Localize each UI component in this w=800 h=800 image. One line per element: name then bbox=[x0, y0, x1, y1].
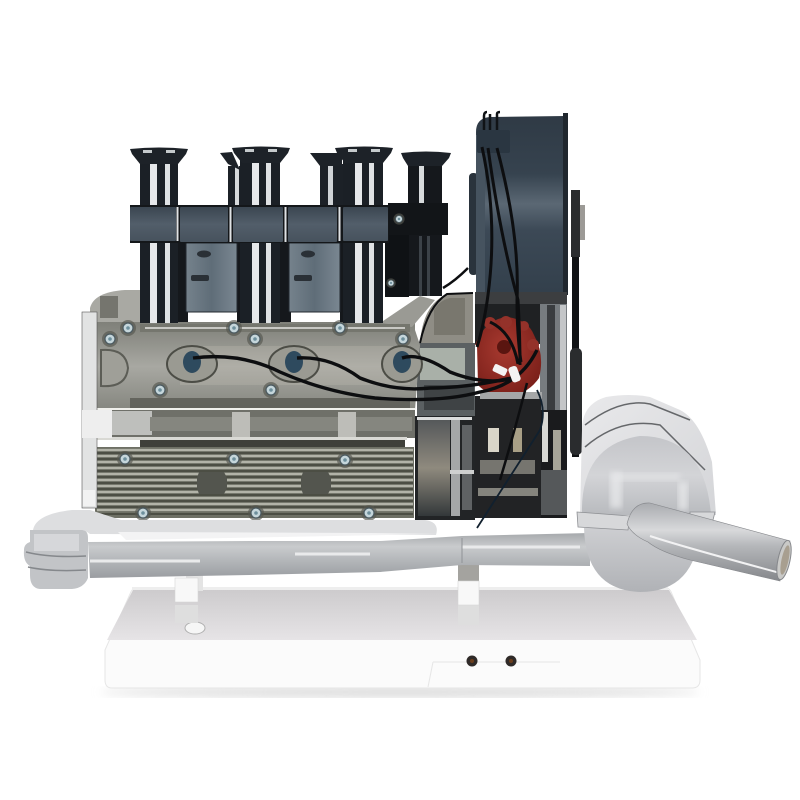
tailpipe bbox=[627, 503, 794, 581]
base plinth bbox=[100, 587, 700, 697]
left clear plate bbox=[82, 312, 97, 508]
distributor cap bbox=[475, 316, 542, 399]
muffler outer shell bbox=[580, 395, 716, 515]
intake plenum bbox=[130, 205, 389, 243]
muffler dome bbox=[582, 436, 711, 515]
engine block bbox=[82, 290, 435, 521]
cooling fins bbox=[95, 447, 414, 518]
fan wire clip bbox=[477, 130, 510, 153]
bolts bbox=[102, 320, 411, 521]
base sockets bbox=[466, 656, 516, 666]
transmission housing bbox=[415, 292, 567, 520]
exhaust supports bbox=[175, 565, 479, 625]
pulley and belt bbox=[570, 190, 585, 457]
cooling fan housing bbox=[469, 112, 568, 295]
muffler bbox=[577, 395, 716, 592]
cylinder head ports bbox=[167, 346, 422, 382]
spark plug wires bbox=[193, 147, 543, 528]
clear housing upper bbox=[420, 294, 473, 345]
rear intake stacks bbox=[220, 152, 451, 297]
clear housing lower bbox=[415, 416, 475, 520]
carburettor boxes bbox=[176, 240, 346, 322]
muffler clamp band bbox=[577, 512, 715, 530]
wire clip bbox=[492, 363, 521, 383]
base peg bbox=[185, 622, 205, 634]
exhaust manifold bbox=[24, 510, 590, 589]
muffler lower bowl bbox=[584, 528, 700, 592]
front intake stacks bbox=[130, 146, 393, 323]
